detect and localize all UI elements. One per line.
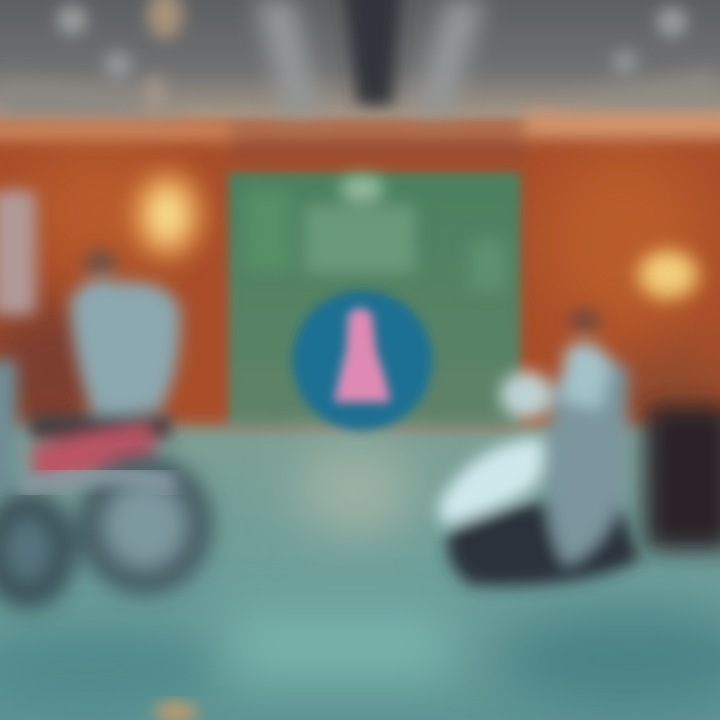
left wheelchair — [0, 250, 199, 596]
ceiling lights — [57, 0, 687, 115]
floor — [0, 425, 720, 720]
cornice band — [0, 112, 720, 162]
pink figure — [334, 308, 390, 402]
panel: green board — [228, 172, 520, 427]
right chair — [438, 310, 720, 586]
wall poster: left — [0, 190, 36, 315]
ceiling — [0, 0, 720, 122]
icon: blue circle with pink figure — [292, 290, 432, 430]
panel: orange walls — [0, 110, 720, 440]
wheels — [0, 469, 199, 596]
ceiling vent — [342, 0, 402, 105]
wall lamp: right — [634, 247, 702, 303]
wall lamp: left — [132, 171, 204, 259]
